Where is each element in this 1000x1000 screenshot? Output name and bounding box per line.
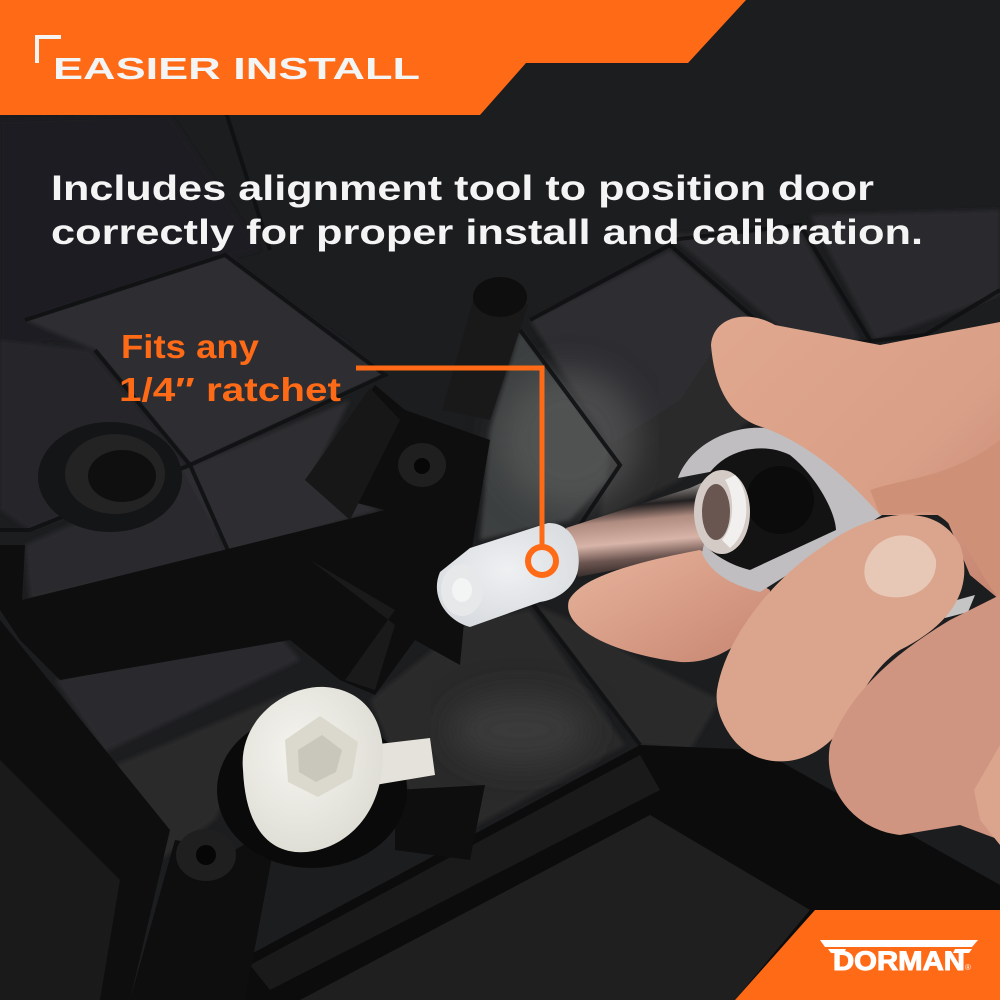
white socket part — [217, 687, 435, 868]
logo: Dorman: ® — [965, 963, 971, 972]
callout label: 1/4″ ratchet — [119, 371, 341, 408]
black bracket structure — [0, 385, 490, 1000]
description text: Includes alignment tool to position door — [51, 169, 874, 208]
header banner — [0, 0, 746, 115]
heading: EASIER INSTALL — [53, 51, 420, 86]
callout label — [119, 328, 341, 408]
icon: corner bracket — [37, 37, 61, 63]
lower dark housing — [0, 620, 1000, 1000]
footer logo panel — [735, 910, 1000, 1000]
logo: Dorman: DORMAN — [833, 946, 965, 976]
tile panels — [0, 115, 1000, 860]
white alignment tool — [437, 523, 579, 627]
hand — [711, 317, 1000, 845]
description text — [51, 169, 923, 252]
round post — [176, 277, 528, 881]
callout label: Fits any — [121, 328, 260, 365]
logo: Dorman — [820, 940, 978, 976]
grommet — [38, 422, 182, 532]
ratchet head — [678, 428, 975, 618]
callout leader line — [356, 368, 556, 575]
lower finger behind tool — [568, 550, 770, 662]
description text: correctly for proper install and calibration. — [51, 213, 923, 252]
ratchet shaft — [566, 470, 752, 577]
